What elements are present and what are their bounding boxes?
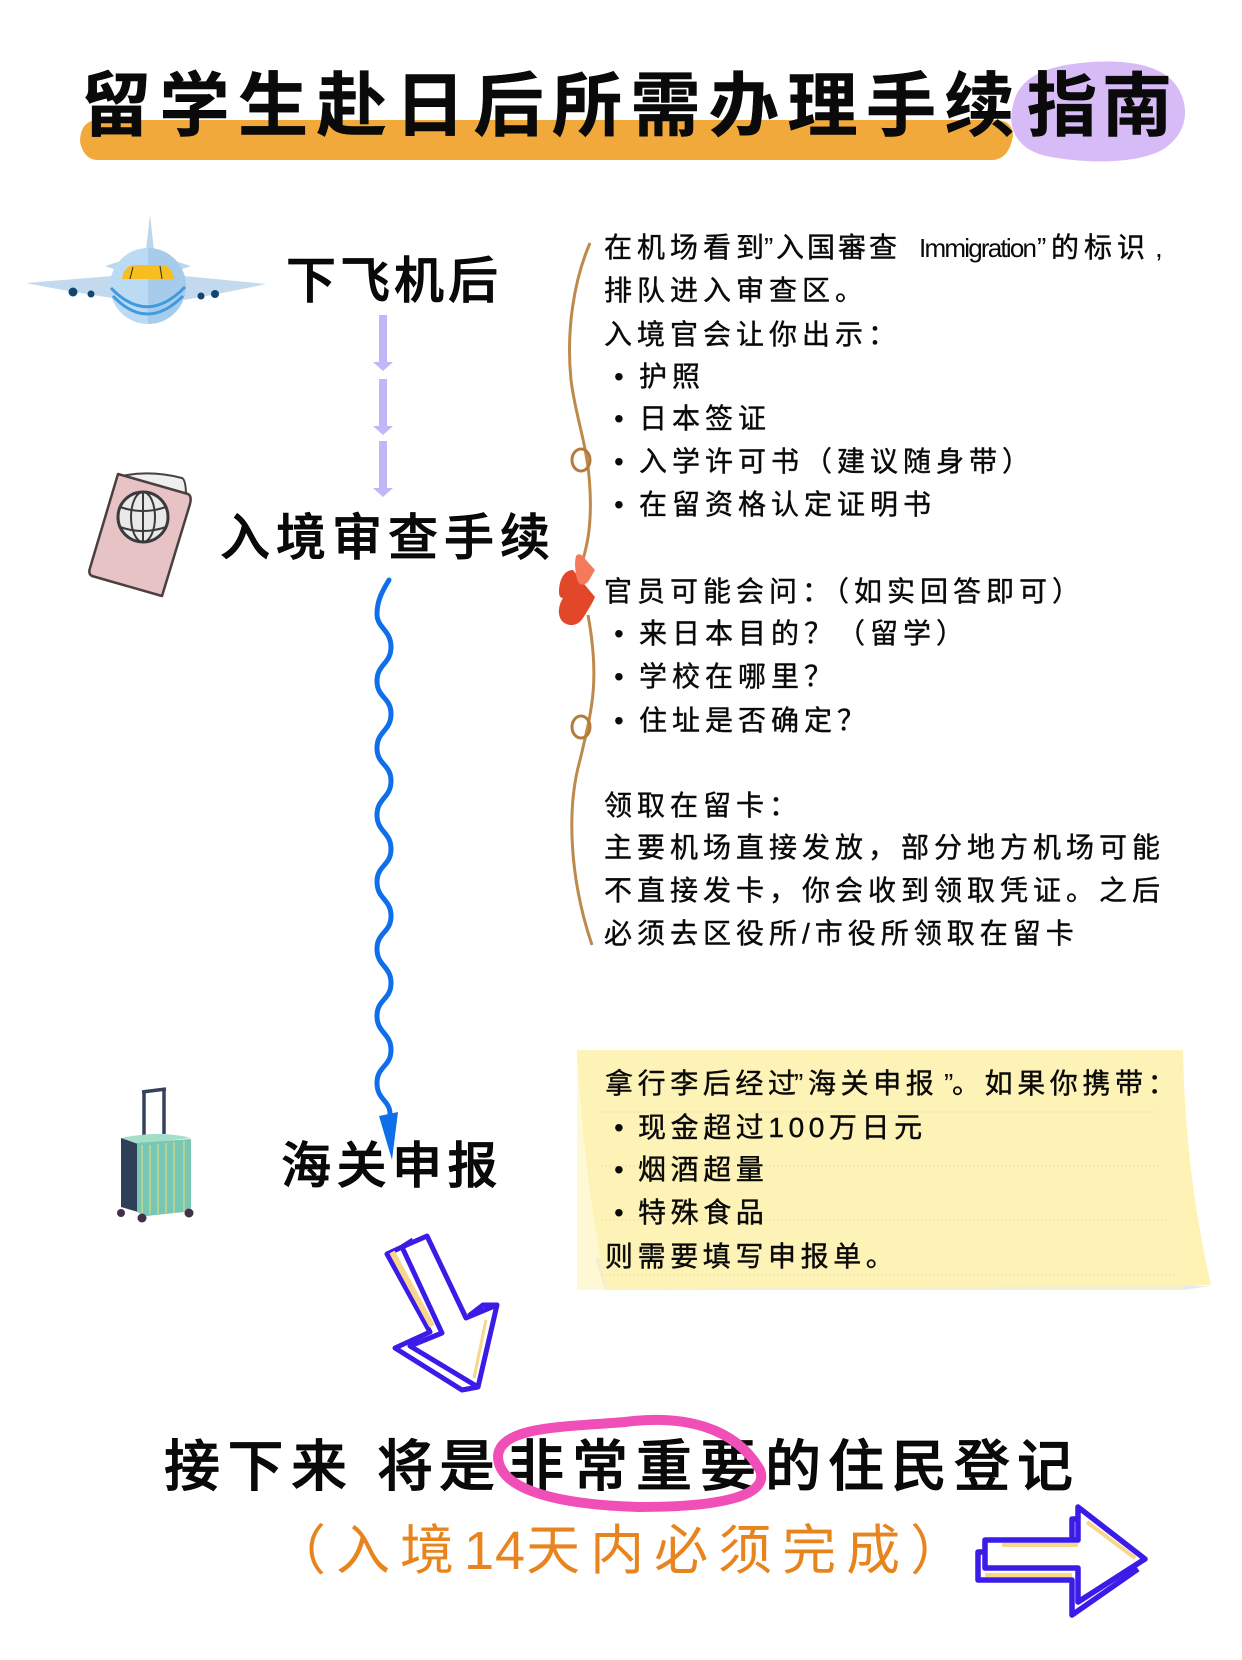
text block: immigration details: , [1155, 232, 1163, 263]
text block: immigration details: 学校在哪里？ [639, 661, 837, 692]
text block: customs details: • [614, 1154, 624, 1185]
text block: immigration details: Immigration [919, 233, 1037, 263]
text block: immigration details: 日本签证 [639, 403, 771, 434]
icon: dashed purple arrows [373, 315, 393, 497]
text block: immigration details: • [614, 705, 624, 736]
icon: passport [89, 473, 191, 596]
icon: suitcase [117, 1089, 194, 1222]
text block: customs details: • [614, 1197, 624, 1228]
callout: next step: 将是 [377, 1435, 501, 1498]
text block: immigration details: • [614, 403, 624, 434]
title [80, 62, 1185, 161]
text block: customs details: 则需要填写申报单。 [605, 1241, 898, 1272]
arrow: right double outline [978, 1507, 1145, 1615]
text block: immigration details: • [614, 618, 624, 649]
text block: customs details: • [614, 1112, 624, 1143]
text block: customs details: 特殊食品 [638, 1197, 768, 1228]
text block: immigration details: 排队进入审查区。 [604, 275, 868, 306]
text block: immigration details: ” [764, 232, 773, 263]
text block: immigration details: • [614, 489, 624, 520]
arrow: blue wavy [377, 580, 398, 1160]
text block: immigration details: 入学许可书（建议随身带） [639, 446, 1035, 477]
text block: immigration details: 不直接发卡，你会收到领取凭证。之后 [604, 875, 1165, 906]
text block: customs details: ” [794, 1068, 803, 1099]
callout: next step: 的住民登记 [765, 1435, 1080, 1498]
callout: next step: 非常重要 [508, 1435, 764, 1498]
text block: customs details: 拿行李后经过 [605, 1068, 801, 1099]
note: 14 day deadline: （入境14天内必须完成） [272, 1521, 974, 1581]
icon: airplane [26, 215, 266, 324]
text block: customs details [605, 1068, 1180, 1272]
heading: after landing: 下飞机后 [286, 253, 502, 309]
text block: immigration details [604, 232, 1165, 949]
text block: immigration details: 在留资格认定证明书 [639, 489, 936, 520]
text block: immigration details: 来日本目的？（留学） [639, 618, 969, 649]
text block: immigration details: • [614, 661, 624, 692]
heading: customs declaration: 海关申报 [281, 1138, 503, 1194]
text block: immigration details: • [614, 361, 624, 392]
panel: sticky note [577, 1050, 1211, 1290]
text block: immigration details: 住址是否确定？ [639, 705, 870, 736]
title: 指南 [1027, 67, 1177, 145]
text block: immigration details: 领取在留卡： [604, 790, 802, 821]
callout: next step: 接下来 [164, 1435, 354, 1498]
text block: immigration details: 入境官会让你出示： [604, 319, 901, 350]
text block: customs details: 现金超过100万日元 [638, 1112, 927, 1143]
title: 留学生赴日后所需办理手续 [81, 67, 1023, 145]
text block: immigration details: 官员可能会问：（如实回答即可） [604, 576, 1085, 607]
text block: immigration details: • [614, 446, 624, 477]
text block: customs details: 海关申报 [808, 1068, 938, 1099]
highlight: pink ellipse [498, 1420, 761, 1507]
text block: immigration details: ” [1037, 232, 1046, 263]
text block: customs details: ” [944, 1068, 953, 1099]
text block: immigration details: 在机场看到 [604, 232, 769, 263]
text block: customs details: 烟酒超量 [638, 1154, 768, 1185]
text block: immigration details: 主要机场直接发放，部分地方机场可能 [604, 832, 1165, 863]
heading: immigration procedure: 入境审查手续 [220, 510, 556, 566]
text block: immigration details: 必须去区役所/市役所领取在留卡 [604, 918, 1079, 949]
text block: customs details: 。如果你携带： [952, 1068, 1180, 1099]
arrow: diagonal double outline [387, 1236, 497, 1390]
text block: immigration details: 的标识 [1051, 232, 1150, 263]
callout: next step [164, 1420, 1080, 1507]
decorative vine with knots and flower [559, 243, 595, 945]
text block: immigration details: 入国審查 [776, 232, 900, 263]
text block: immigration details: 护照 [639, 361, 705, 392]
